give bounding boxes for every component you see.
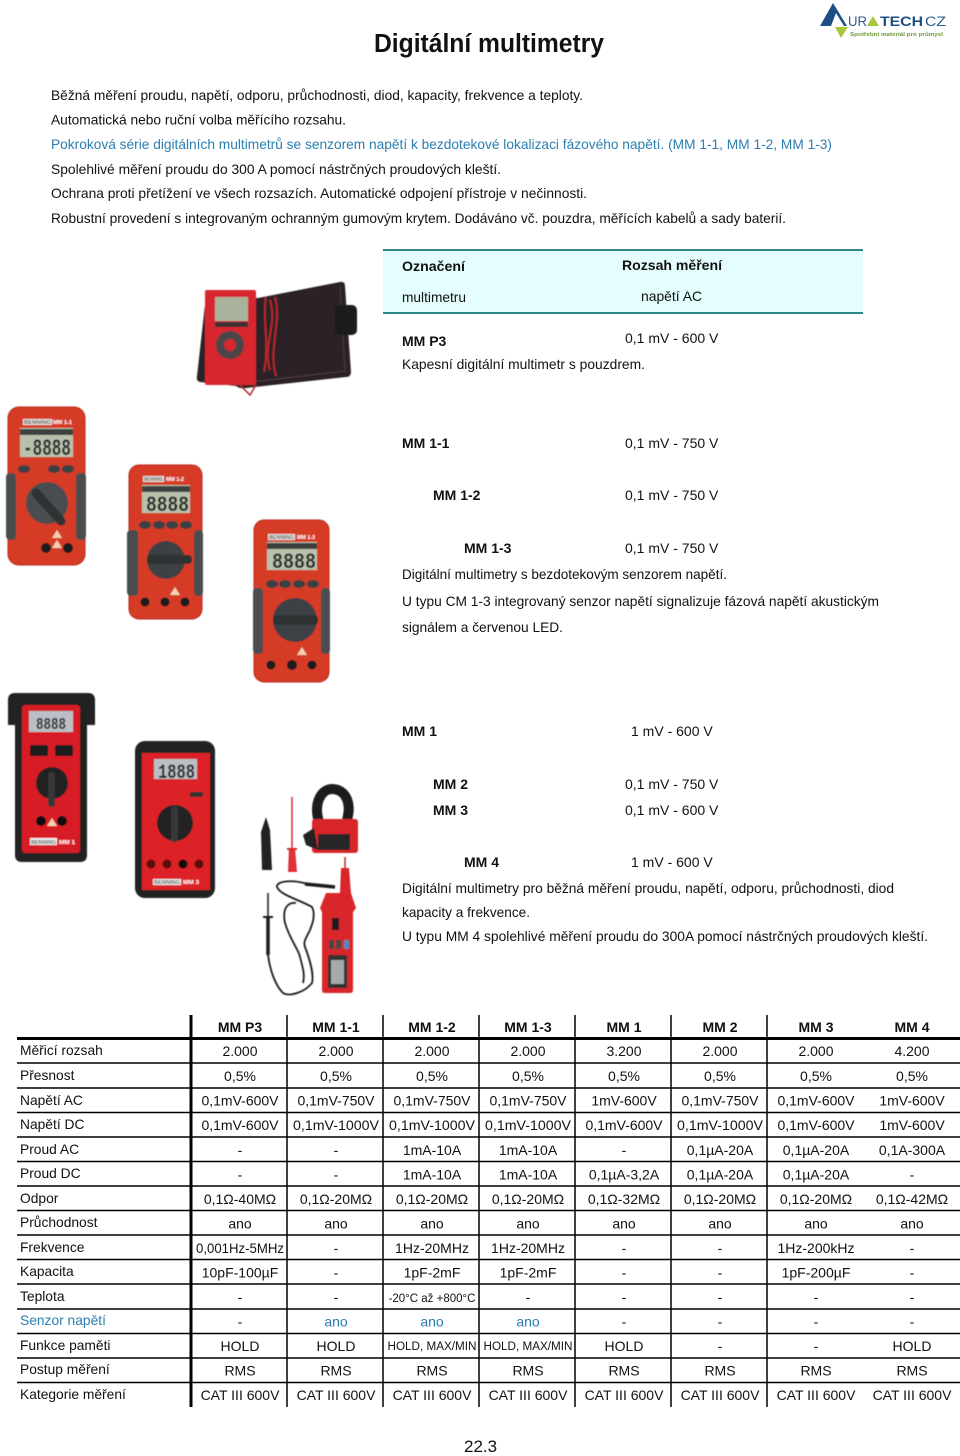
table values: - (718, 1240, 723, 1256)
table values: - (910, 1289, 915, 1305)
table values: 0,001Hz-5MHz (196, 1240, 284, 1256)
product text: MM 1-1, 1-2, 1-3: 0,1 mV - 750 V (625, 435, 719, 451)
table values: ano (516, 1216, 540, 1232)
table values: ano (324, 1216, 348, 1232)
table values: 0,1µA-20A (783, 1166, 850, 1182)
table values: 0,5% (896, 1068, 928, 1084)
range table header: napětí AC (641, 288, 702, 304)
product text: MM 1, 2, 3, 4: MM 3 (433, 802, 468, 818)
table row labels: Odpor (20, 1191, 59, 1206)
table values: 0,1mV-1000V (293, 1117, 380, 1133)
product text: MM 1-1, 1-2, 1-3: 0,1 mV - 750 V (625, 487, 719, 503)
table values: CAT III 600V (489, 1387, 568, 1403)
table values: - (814, 1314, 819, 1330)
table values: HOLD (893, 1338, 931, 1354)
table values: ano (804, 1216, 828, 1232)
product text: MM 1, 2, 3, 4 (402, 723, 928, 944)
image: MM 1-2 multimeter: MM 1-2 (166, 477, 184, 483)
table values: 2.000 (510, 1043, 546, 1059)
image: MM 3 multimeter: 1888 (158, 762, 195, 785)
table values: 0,1Ω-20MΩ (396, 1191, 468, 1207)
range table header: Označení (402, 258, 466, 274)
table values: HOLD, MAX/MIN (388, 1341, 476, 1353)
logo: Auratech CZ (820, 3, 946, 38)
logo: Auratech CZ: Spotřební materiál pro průmysl (850, 31, 944, 38)
image: MM 1 multimeter: BENNING (31, 840, 56, 846)
image: MM 3 multimeter: BENNING (154, 880, 180, 886)
table values: 1Hz-20MHz (395, 1240, 469, 1256)
product text: MM P3: Kapesní digitální multimetr s pouzdrem. (402, 356, 645, 372)
table values: - (718, 1264, 723, 1280)
table row labels: Napětí DC (20, 1117, 84, 1132)
image: MM 1-3 multimeter: 8888 (272, 550, 316, 575)
table row labels: Kapacita (20, 1264, 74, 1279)
image: MM 1-1 multimeter: -8888 (23, 436, 71, 462)
table row labels (20, 1043, 126, 1402)
table column headers: MM 3 (798, 1019, 834, 1035)
table values: 1pF-200µF (782, 1264, 850, 1280)
table values: HOLD (317, 1338, 355, 1354)
table values: ano (516, 1314, 540, 1330)
product text: MM 1-1, 1-2, 1-3: Digitální multimetry s bezdotekovým senzorem napětí. (402, 566, 727, 582)
product text: MM 1-1, 1-2, 1-3: MM 1-1 (402, 435, 450, 451)
logo: Auratech CZ: UR (848, 14, 867, 29)
table values: - (526, 1289, 531, 1305)
table values: ano (324, 1314, 348, 1330)
comparison table (17, 1015, 960, 1407)
product text: MM 1, 2, 3, 4: MM 1 (402, 723, 437, 739)
table values: RMS (800, 1362, 832, 1378)
table values: - (238, 1314, 243, 1330)
table values: 0,1Ω-32MΩ (588, 1191, 660, 1207)
table values: - (910, 1240, 915, 1256)
table values: 0,5% (224, 1068, 256, 1084)
table values: 0,1mV-750V (297, 1092, 375, 1108)
table row labels: Měřicí rozsah (20, 1043, 103, 1058)
table row labels: Proud AC (20, 1142, 79, 1157)
table values: 0,1µA-3,2A (589, 1166, 660, 1182)
product text: MM 1, 2, 3, 4: U typu MM 4 spolehlivé měření proudu do 300A pomocí nástrčných proudových kleští. (402, 928, 928, 944)
image: MM 1-2 multimeter: 8888 (146, 493, 189, 518)
table values: - (814, 1338, 819, 1354)
table values: - (334, 1289, 339, 1305)
table values: 0,1mV-750V (393, 1092, 471, 1108)
table values: - (622, 1240, 627, 1256)
table values: - (334, 1166, 339, 1182)
table row labels: Průchodnost (20, 1215, 98, 1230)
table values: RMS (704, 1362, 736, 1378)
table values: 0,1Ω-42MΩ (876, 1191, 948, 1207)
table row labels: Frekvence (20, 1240, 85, 1255)
table column headers: MM 2 (702, 1019, 738, 1035)
table values: - (718, 1289, 723, 1305)
intro text block: Běžná měření proudu, napětí, odporu, průchodnosti, diod, kapacity, frekvence a teploty. (51, 87, 583, 103)
table values: CAT III 600V (873, 1387, 952, 1403)
image: MM 1-2 multimeter: BENNING (144, 477, 163, 483)
table values (196, 1043, 952, 1403)
image: MM 1-1 multimeter: MM 1-1 (53, 420, 72, 426)
table values: 1Hz-20MHz (491, 1240, 565, 1256)
table values: HOLD (221, 1338, 259, 1354)
table values: 1mA-10A (499, 1166, 558, 1182)
table values: CAT III 600V (585, 1387, 664, 1403)
table values: 0,1mV-600V (777, 1117, 855, 1133)
table values: ano (228, 1216, 252, 1232)
product text: MM 1-1, 1-2, 1-3 (402, 435, 879, 635)
table values: 0,1Ω-20MΩ (780, 1191, 852, 1207)
table values: 2.000 (222, 1043, 258, 1059)
table values: 1mV-600V (879, 1117, 945, 1133)
intro text block: Pokroková série digitálních multimetrů se senzorem napětí k bezdotekové lokalizaci fázového napětí. (MM 1-1, MM 1-2, MM 1-3) (51, 136, 832, 152)
product text: MM 1-1, 1-2, 1-3: 0,1 mV - 750 V (625, 540, 719, 556)
table values: - (910, 1314, 915, 1330)
table column headers: MM 1-2 (408, 1019, 456, 1035)
table values: RMS (224, 1362, 256, 1378)
table values: HOLD (605, 1338, 643, 1354)
table values: - (814, 1289, 819, 1305)
table values: RMS (416, 1362, 448, 1378)
table values: - (622, 1264, 627, 1280)
table values: RMS (512, 1362, 544, 1378)
range table header (383, 249, 863, 314)
table values: 1mV-600V (591, 1092, 657, 1108)
table values: 4.200 (894, 1043, 930, 1059)
product text: MM 1, 2, 3, 4: Digitální multimetry pro běžná měření proudu, napětí, odporu, průchodnosti, diod (402, 880, 894, 896)
table column headers: MM 4 (894, 1019, 930, 1035)
table values: CAT III 600V (393, 1387, 472, 1403)
image: MM 1 multimeter: MM 1 (59, 840, 75, 846)
logo: Auratech CZ: TECH (880, 14, 923, 29)
table values: ano (420, 1216, 444, 1232)
table values: 1mA-10A (403, 1142, 462, 1158)
image: MM 1-3 multimeter: BENNING (269, 535, 294, 541)
table values: - (334, 1142, 339, 1158)
table grid (17, 1015, 960, 1407)
table values: 0,5% (512, 1068, 544, 1084)
table values: - (910, 1264, 915, 1280)
logo: Auratech CZ: CZ (925, 14, 946, 29)
table values: 2.000 (798, 1043, 834, 1059)
table values: -20°C až +800°C (389, 1293, 475, 1305)
table values: 0,1µA-20A (687, 1166, 754, 1182)
product text: MM 1, 2, 3, 4: 0,1 mV - 750 V (625, 776, 719, 792)
table column headers: MM P3 (218, 1019, 262, 1035)
image: MM P3 in leather case (197, 282, 357, 395)
table values: 0,1µA-20A (687, 1142, 754, 1158)
table values: RMS (896, 1362, 928, 1378)
table values: CAT III 600V (681, 1387, 760, 1403)
table values: 0,5% (608, 1068, 640, 1084)
table row labels: Funkce paměti (20, 1338, 110, 1353)
table values: 0,5% (320, 1068, 352, 1084)
table values: 0,1Ω-20MΩ (300, 1191, 372, 1207)
table values: - (334, 1264, 339, 1280)
table values: 0,5% (704, 1068, 736, 1084)
table values: 0,1mV-1000V (677, 1117, 764, 1133)
product text: MM 1, 2, 3, 4: 1 mV - 600 V (631, 854, 713, 870)
table values: - (238, 1166, 243, 1182)
table values: 0,1mV-750V (489, 1092, 567, 1108)
table column headers: MM 1 (606, 1019, 642, 1035)
intro text block: Spolehlivé měření proudu do 300 A pomocí nástrčných proudových kleští. (51, 161, 501, 177)
table values: 0,1mV-600V (585, 1117, 663, 1133)
product text: MM 1-1, 1-2, 1-3: MM 1-2 (433, 487, 481, 503)
table values: - (622, 1314, 627, 1330)
intro text block: Automatická nebo ruční volba měřícího rozsahu. (51, 112, 346, 128)
image: MM 1-1 multimeter: BENNING (24, 420, 51, 426)
table values: - (622, 1289, 627, 1305)
product text: MM 1-1, 1-2, 1-3: MM 1-3 (464, 540, 512, 556)
table values: 0,1A-300A (879, 1142, 946, 1158)
table values: 1pF-2mF (404, 1264, 460, 1280)
title: Digitální multimetry (374, 30, 605, 58)
table values: 0,5% (800, 1068, 832, 1084)
table values: 0,1Ω-40MΩ (204, 1191, 276, 1207)
intro text block: Ochrana proti přetížení ve všech rozsazích. Automatické odpojení přístroje v nečinnosti. (51, 185, 587, 201)
table values: HOLD, MAX/MIN (484, 1341, 572, 1353)
table values: 2.000 (702, 1043, 738, 1059)
table values: 1mA-10A (499, 1142, 558, 1158)
image: MM 3 multimeter (135, 741, 215, 898)
table values: ano (612, 1216, 636, 1232)
intro text block: Robustní provedení s integrovaným ochranným gumovým krytem. Dodáváno vč. pouzdra, měřících kabelů a sady baterií. (51, 210, 786, 226)
page number: 22.3 (464, 1437, 497, 1456)
table values: CAT III 600V (777, 1387, 856, 1403)
image: MM 1-1 multimeter (6, 407, 86, 565)
table values: 0,5% (416, 1068, 448, 1084)
table values: - (718, 1314, 723, 1330)
table values: 0,1µA-20A (783, 1142, 850, 1158)
table values: CAT III 600V (297, 1387, 376, 1403)
image: MM 3 multimeter: MM 3 (183, 880, 199, 886)
product text: MM P3 (402, 330, 719, 372)
table values: - (238, 1142, 243, 1158)
image: MM 1-3 multimeter: MM 1-3 (297, 535, 315, 541)
product text: MM 1-1, 1-2, 1-3: U typu CM 1-3 integrovaný senzor napětí signalizuje fázová napětí akustickým (402, 593, 879, 609)
range table header: Rozsah měření (622, 257, 723, 273)
table row labels: Proud DC (20, 1166, 81, 1181)
table values: 0,1mV-750V (681, 1092, 759, 1108)
table values: 0,1mV-600V (201, 1117, 279, 1133)
table values: ano (900, 1216, 924, 1232)
image: MM 1-2 multimeter (127, 465, 203, 619)
table values: 0,1mV-600V (777, 1092, 855, 1108)
image: MM 4 clamp, probes and cable (261, 789, 358, 994)
table values: 2.000 (318, 1043, 354, 1059)
table row labels: Napětí AC (20, 1093, 83, 1108)
table values: 1pF-2mF (500, 1264, 556, 1280)
table values: 3.200 (606, 1043, 642, 1059)
table values: 1mV-600V (879, 1092, 945, 1108)
table values: - (622, 1142, 627, 1158)
image: MM 1 multimeter (8, 693, 95, 862)
table values: ano (708, 1216, 732, 1232)
table column headers (218, 1019, 930, 1035)
product text: MM 1, 2, 3, 4: kapacity a frekvence. (402, 904, 530, 920)
table row labels: Teplota (20, 1289, 65, 1304)
table values: 10pF-100µF (202, 1264, 278, 1280)
table values: - (334, 1240, 339, 1256)
table values: CAT III 600V (201, 1387, 280, 1403)
intro text block (51, 87, 832, 226)
product text: MM 1, 2, 3, 4: 0,1 mV - 600 V (625, 802, 719, 818)
range table header: multimetru (402, 289, 466, 305)
table column headers: MM 1-1 (312, 1019, 360, 1035)
table values: - (238, 1289, 243, 1305)
table values: - (718, 1338, 723, 1354)
table row labels: Postup měření (20, 1362, 110, 1377)
table column headers: MM 1-3 (504, 1019, 552, 1035)
product text: MM 1, 2, 3, 4: 1 mV - 600 V (631, 723, 713, 739)
table values: 1Hz-200kHz (777, 1240, 855, 1256)
table row labels: Přesnost (20, 1068, 75, 1083)
product text: MM 1, 2, 3, 4: MM 4 (464, 854, 499, 870)
table values: 1mA-10A (403, 1166, 462, 1182)
table row labels: Senzor napětí (20, 1313, 106, 1328)
product text: MM P3: 0,1 mV - 600 V (625, 330, 719, 346)
table values: RMS (320, 1362, 352, 1378)
table values: 2.000 (414, 1043, 450, 1059)
table values: ano (420, 1314, 444, 1330)
product text: MM 1, 2, 3, 4: MM 2 (433, 776, 468, 792)
table values: RMS (608, 1362, 640, 1378)
table values: 0,1Ω-20MΩ (684, 1191, 756, 1207)
table values: 0,1mV-600V (201, 1092, 279, 1108)
table values: 0,1mV-1000V (389, 1117, 476, 1133)
table values: 0,1mV-1000V (485, 1117, 572, 1133)
table values: 0,1Ω-20MΩ (492, 1191, 564, 1207)
product text: MM P3: MM P3 (402, 333, 447, 349)
image: MM 1 multimeter: 8888 (36, 716, 66, 735)
table values: - (910, 1166, 915, 1182)
table row labels: Kategorie měření (20, 1387, 126, 1402)
image: MM 1-3 multimeter (253, 520, 330, 682)
product text: MM 1-1, 1-2, 1-3: signálem a červenou LED. (402, 619, 563, 635)
